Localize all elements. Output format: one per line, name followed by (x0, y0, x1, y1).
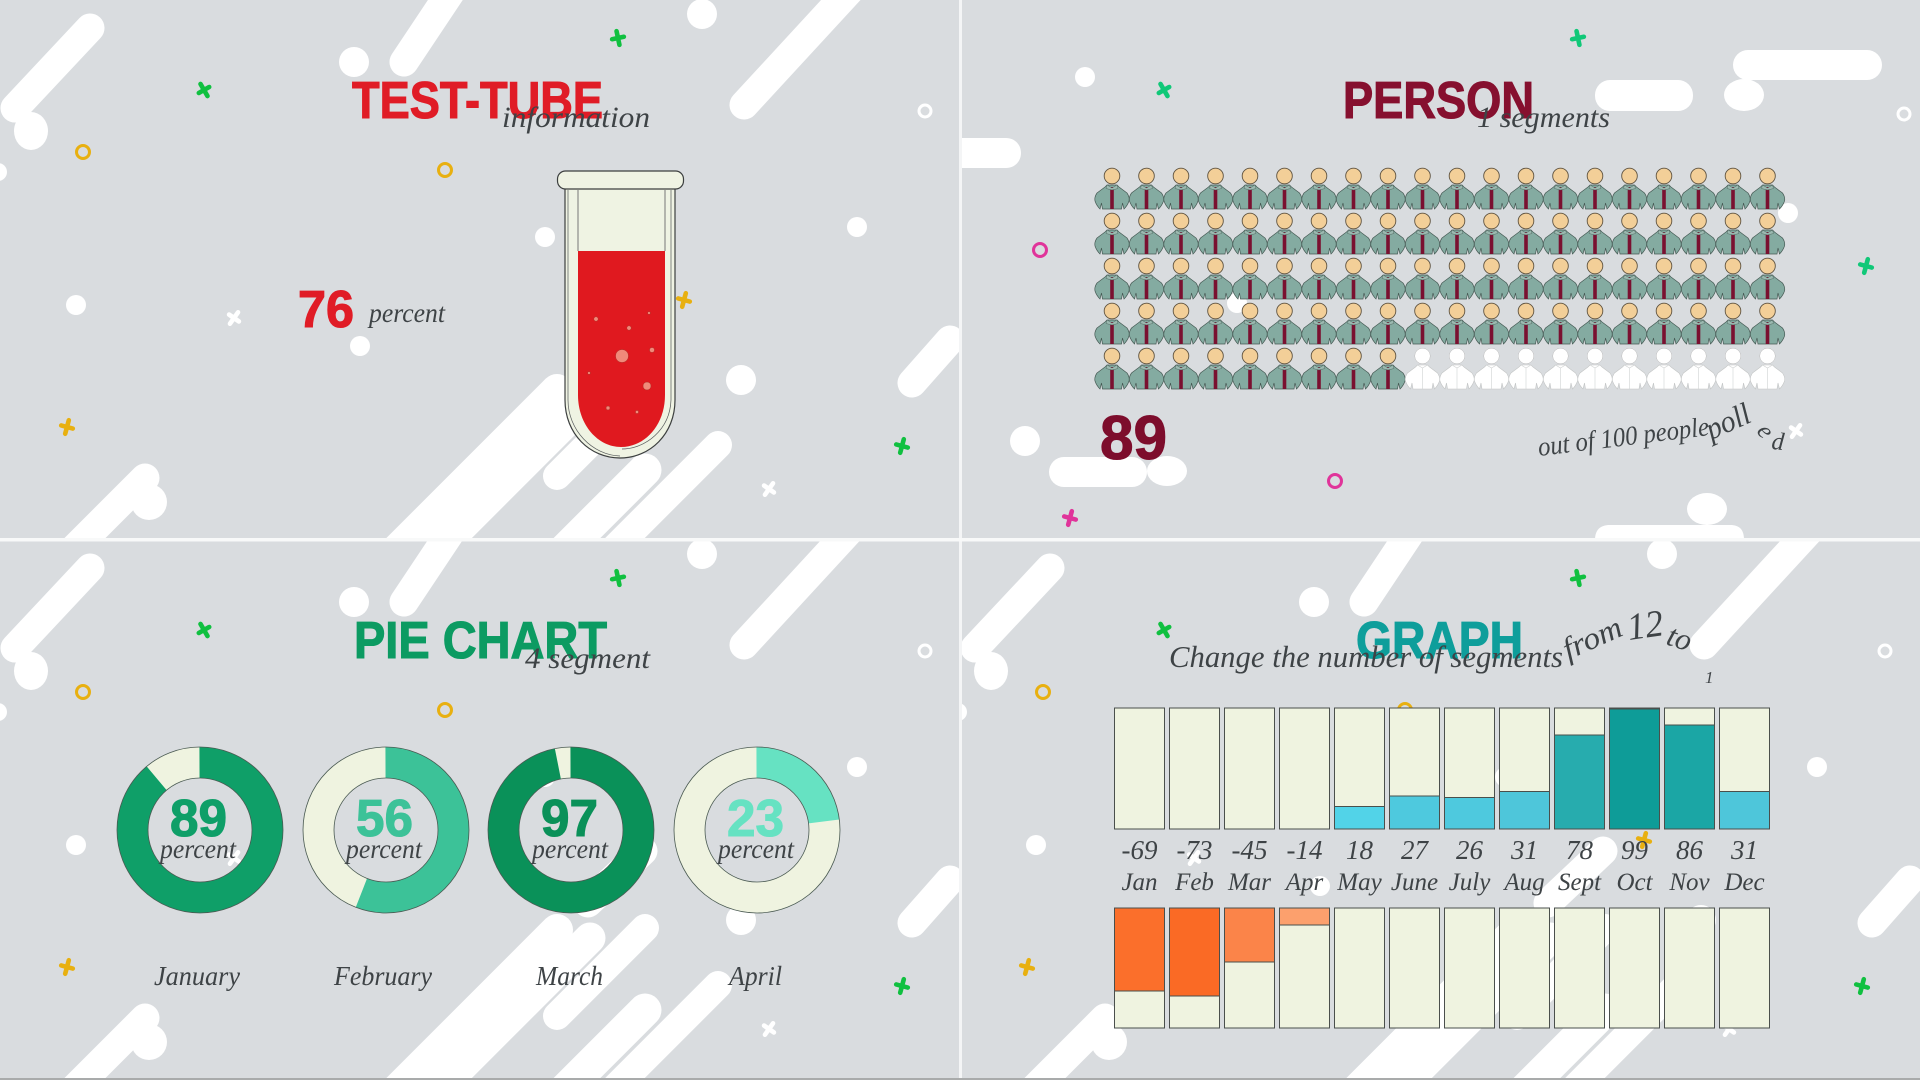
donut: February 56 percent: percent (344, 834, 423, 864)
subtitle: change the number of segments from 12 to 1: 12 (1624, 602, 1666, 649)
month labels: February (333, 961, 432, 991)
data values: -73 (1176, 835, 1212, 865)
month labels: July (1449, 869, 1491, 896)
month labels: Nov (1668, 869, 1711, 896)
data values: 78 (1566, 835, 1594, 865)
panel: test tube (0, 0, 950, 583)
bar chart: negative values (1114, 908, 1770, 1028)
caption: out of 100 people polled: e (1751, 419, 1780, 444)
data values: 99 (1621, 835, 1648, 865)
value: 89: 89 (1100, 404, 1167, 473)
month labels: May (1336, 869, 1383, 896)
title: pie chart: PIE CHART (354, 612, 607, 670)
month labels: January (154, 961, 240, 991)
data values: 31 (1730, 835, 1758, 865)
month labels: Apr (1284, 869, 1324, 896)
title: person: PERSON (1343, 72, 1534, 130)
month labels: June (1391, 869, 1438, 896)
value: 76 percent: percent (367, 298, 446, 328)
data values: -14 (1286, 835, 1322, 865)
subtitle: change the number of segments from 12 to 1: 1 (1705, 668, 1714, 687)
subtitle: 1 segments: 1 segments (1477, 101, 1610, 134)
icon: test tube (558, 171, 684, 458)
data values: -45 (1232, 835, 1268, 865)
donut: April 23 percent: 23 (727, 790, 784, 848)
panel: person (962, 30, 1910, 540)
title: graph: GRAPH (1356, 612, 1523, 670)
caption: out of 100 people polled: out of 100 people (1536, 411, 1710, 462)
caption: out of 100 people polled: d (1770, 428, 1786, 456)
data values (1122, 835, 1758, 865)
month labels: Dec (1723, 869, 1765, 896)
month labels: Oct (1616, 869, 1654, 896)
caption: out of 100 people polled (1536, 396, 1786, 462)
subtitle: change the number of segments from 12 to 1: from (1557, 609, 1627, 666)
donut: February 56 percent (303, 747, 469, 913)
data values: 18 (1346, 835, 1374, 865)
subtitle: 4 segment: 4 segment (525, 642, 651, 675)
month labels: Feb (1174, 869, 1214, 896)
data values: 27 (1401, 835, 1430, 865)
donut: March 97 percent: percent (530, 834, 609, 864)
data values: 31 (1510, 835, 1538, 865)
panel: graph (949, 530, 1910, 1080)
donut: April 23 percent: percent (716, 834, 795, 864)
subtitle: change the number of segments from 12 to 1: to (1663, 617, 1697, 658)
panel: pie chart (0, 530, 950, 1080)
month labels (1121, 869, 1765, 896)
title: test-tube: TEST-TUBE (352, 72, 603, 130)
donut: January 89 percent: percent (158, 834, 237, 864)
month labels: Aug (1502, 869, 1545, 896)
donut: March 97 percent: 97 (541, 790, 598, 848)
donut: January 89 percent: 89 (170, 790, 227, 848)
month labels: Jan (1121, 869, 1158, 896)
pictogram: 100 people (1095, 168, 1785, 389)
month labels: Mar (1227, 869, 1271, 896)
panel background decoration (0, 0, 950, 583)
value: 76 percent (298, 281, 446, 339)
data values: 86 (1676, 835, 1704, 865)
month labels (154, 961, 782, 991)
month labels: March (535, 961, 603, 991)
data values: 26 (1456, 835, 1484, 865)
month labels: Sept (1558, 869, 1602, 896)
donut: April 23 percent (674, 747, 840, 913)
data values: -69 (1122, 835, 1158, 865)
caption: out of 100 people polled: poll (1698, 396, 1756, 447)
subtitle: information: information (502, 101, 650, 134)
month labels: April (727, 961, 782, 991)
panel background decoration (0, 530, 950, 1080)
subtitle: change the number of segments from 12 to 1 (1169, 602, 1714, 687)
donut: February 56 percent: 56 (356, 790, 413, 848)
subtitle: change the number of segments from 12 to 1: Change the number of segments (1169, 639, 1563, 674)
donut: March 97 percent (488, 747, 654, 913)
value: 76 percent: 76 (298, 281, 354, 339)
panel background decoration (962, 30, 1910, 540)
bar chart: positive values (1114, 708, 1770, 829)
donut: January 89 percent (117, 747, 283, 913)
panel background decoration (949, 530, 1910, 1080)
